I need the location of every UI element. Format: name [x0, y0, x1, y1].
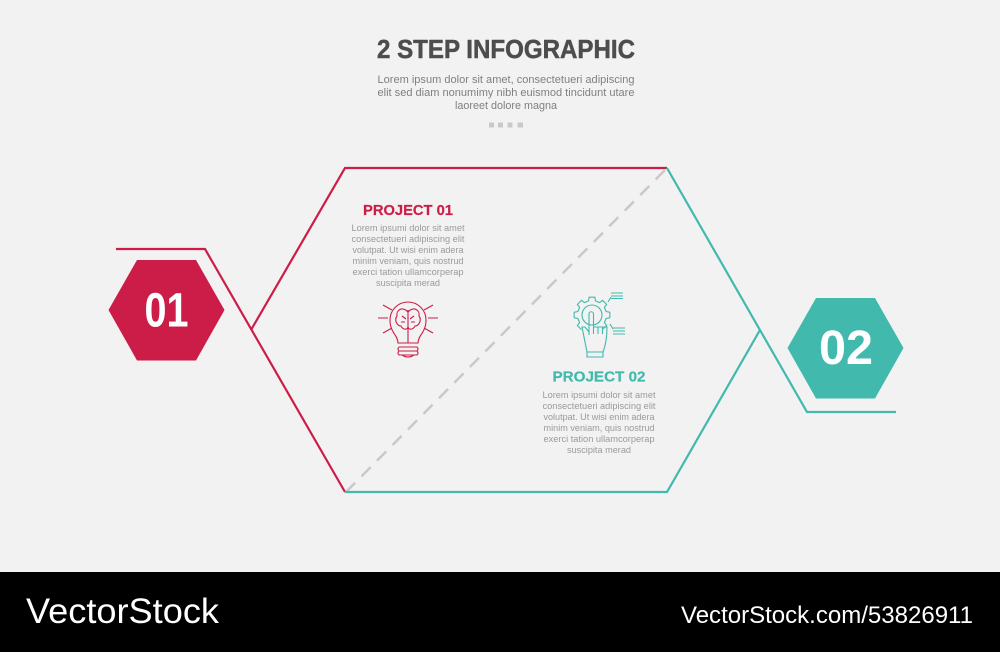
project 01 text: volutpat. Ut wisi enim adera [352, 245, 464, 255]
subtitle text: elit sed diam nonumimy nibh euismod tincidunt utare [378, 87, 634, 99]
project 01 text: suscipita merad [376, 278, 440, 288]
project 01 text: consectetueri adipiscing elit [352, 234, 465, 244]
icon: hand pressing gear [574, 293, 625, 357]
footer logo: VectorStock [26, 592, 220, 631]
project 02 text: volutpat. Ut wisi enim adera [544, 412, 655, 422]
dashed diagonal divider [346, 168, 667, 492]
project 02 text: consectetueri adipiscing elit [542, 401, 656, 411]
project 01 heading: PROJECT 01 [363, 203, 453, 219]
project 01 text: minim veniam, quis nostrud [352, 256, 464, 266]
footer image id: VectorStock.com/53826911 [681, 602, 973, 629]
project 01 text [352, 223, 465, 288]
subtitle text: laoreet dolore magna [455, 100, 557, 112]
badge 01: 01 [144, 284, 188, 338]
step 2 bottom outline [345, 330, 760, 492]
title dots [489, 122, 523, 128]
step 2 outline [667, 168, 896, 412]
badge 02 [788, 298, 904, 398]
icon: light bulb with brain [378, 302, 438, 357]
project 02 heading: PROJECT 02 [552, 370, 646, 386]
project 02 text: Lorem ipsumi dolor sit amet [542, 390, 656, 400]
project 02 text: minim veniam, quis nostrud [544, 423, 654, 433]
subtitle text [378, 74, 634, 112]
project 01 text: exerci tation ullamcorperap [352, 267, 464, 277]
step 1 outline [116, 249, 345, 492]
title: 2 STEP INFOGRAPHIC [377, 36, 635, 64]
badge 02: 02 [819, 322, 873, 375]
subtitle text: Lorem ipsum dolor sit amet, consectetueri adipiscing [378, 74, 634, 86]
project 02 text: suscipita merad [567, 445, 631, 455]
project 02 text: exerci tation ullamcorperap [544, 434, 654, 444]
project 02 text [542, 390, 656, 455]
footer bar [0, 572, 1000, 652]
badge 01 [108, 260, 224, 360]
step 1 top outline [251, 168, 667, 330]
project 01 text: Lorem ipsumi dolor sit amet [352, 223, 465, 233]
